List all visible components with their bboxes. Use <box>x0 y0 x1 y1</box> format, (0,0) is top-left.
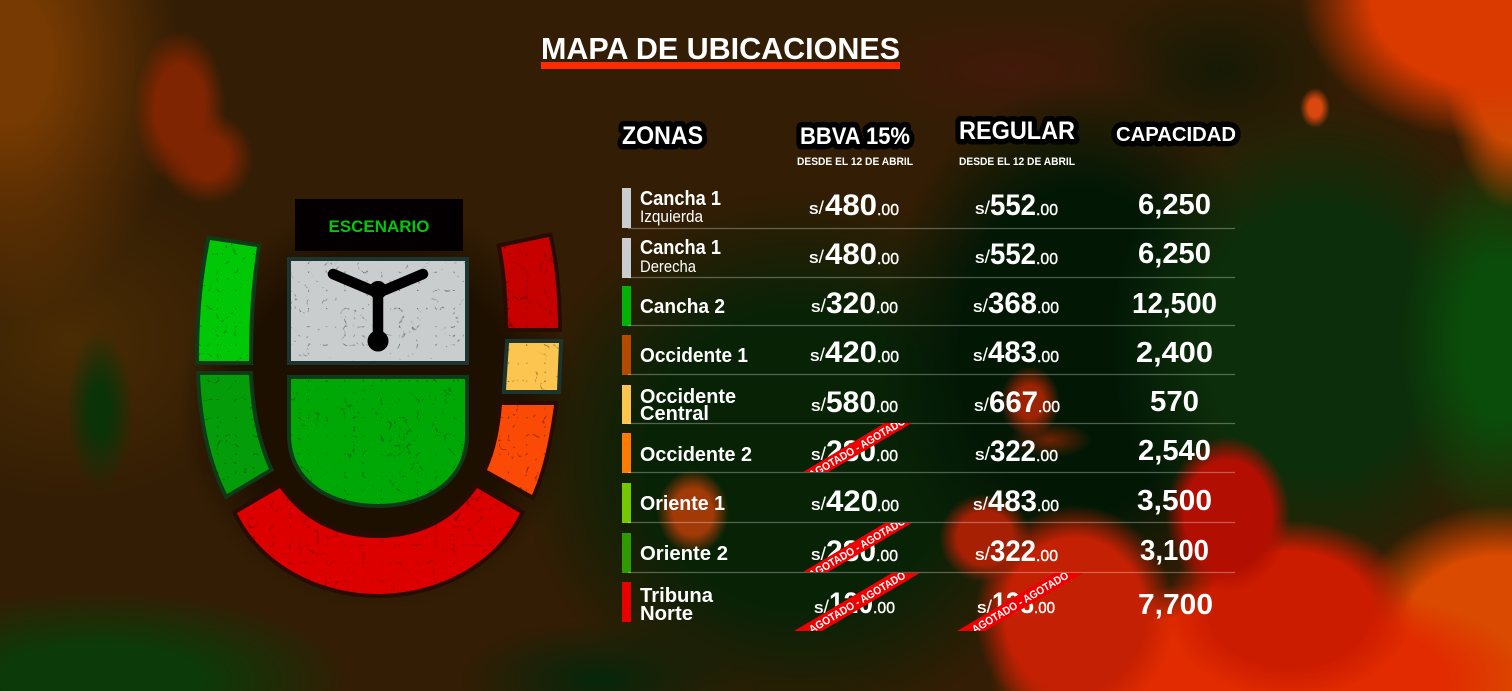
row: Cancha 1 Izquierda: Izquierda <box>640 207 703 226</box>
sold-out ribbon: Oriente 2 BBVA <box>803 523 912 572</box>
row: Occidente Central: Occidente <box>640 386 736 408</box>
row: Occidente 1 <box>622 335 1235 375</box>
icon: stage runway <box>333 274 423 352</box>
row: Oriente 1: .00 <box>877 498 899 515</box>
row: Occidente 1: S/ <box>973 345 988 365</box>
header: zonas: ZONAS <box>622 122 703 150</box>
row: Occidente 1: S/ <box>810 345 825 365</box>
header: BBVA 15%: BBVA 15% <box>800 123 910 150</box>
row: Oriente 2: S/ <box>811 544 826 564</box>
row: Cancha 1 Derecha <box>622 237 1235 278</box>
row: Occidente Central <box>622 385 1235 425</box>
row: Tribuna Norte: 7,700 <box>1138 589 1213 621</box>
zone: Oriente 2 <box>200 375 269 494</box>
zone: Tribuna Norte <box>237 488 520 594</box>
row: Tribuna Norte: 138 <box>992 587 1034 620</box>
row: Cancha 2: 368 <box>988 287 1037 320</box>
sold-out ribbon: Occidente 2 BBVA <box>803 423 912 472</box>
row: Occidente 1: Occidente 1 <box>640 345 748 367</box>
row: Tribuna Norte <box>622 582 1213 625</box>
header: regular <box>959 117 1075 168</box>
row: Tribuna Norte: .00 <box>1034 600 1055 617</box>
row: Cancha 1 Derecha: S/ <box>975 247 990 267</box>
row: Cancha 2: .00 <box>1037 300 1059 317</box>
row: Tribuna Norte: .00 <box>873 600 895 617</box>
row: Occidente Central: S/ <box>811 395 826 415</box>
sold-out ribbon: Tribuna Norte BBVA: AGOTADO - AGOTADO <box>807 569 908 636</box>
row: Cancha 1 Izquierda: 552 <box>990 189 1036 222</box>
row: Occidente 1: .00 <box>877 349 899 366</box>
stage label: ESCENARIO <box>328 217 430 236</box>
row: Cancha 2: 320 <box>826 287 876 320</box>
row: Occidente Central: 570 <box>1150 386 1199 418</box>
row: Occidente Central: Central <box>640 403 709 425</box>
header: regular: REGULAR <box>959 117 1075 145</box>
header: BBVA 15% <box>797 123 913 168</box>
sold-out ribbon: Oriente 2 BBVA: AGOTADO - AGOTADO <box>807 515 908 581</box>
row: Cancha 1 Derecha: S/ <box>809 247 824 267</box>
row: Oriente 1: .00 <box>1037 498 1059 515</box>
row: Cancha 1 Izquierda: S/ <box>809 198 824 218</box>
zone: Cancha 2 <box>291 379 465 504</box>
row: Cancha 2: .00 <box>876 300 898 317</box>
row: Occidente 2: S/ <box>975 444 990 464</box>
row: Cancha 2: Cancha 2 <box>640 296 725 318</box>
zone: Oriente 1 <box>199 240 257 361</box>
row: Occidente 2: S/ <box>811 444 826 464</box>
row: Occidente 1: 420 <box>825 336 877 369</box>
row: Tribuna Norte: Tribuna <box>640 585 714 607</box>
row: Cancha 1 Derecha: 552 <box>990 238 1036 271</box>
row: Tribuna Norte: S/ <box>977 597 992 617</box>
row: Cancha 1 Izquierda: .00 <box>1036 202 1058 219</box>
row: Cancha 2 <box>622 286 1235 326</box>
row: Oriente 2: .00 <box>1036 548 1058 565</box>
row: Oriente 1 <box>622 483 1235 523</box>
zone: Occidente 2 <box>487 405 554 495</box>
row: Occidente 2: Occidente 2 <box>640 444 752 466</box>
row: Cancha 1 Derecha: 480 <box>825 238 877 271</box>
row: Oriente 1: Oriente 1 <box>640 493 725 515</box>
row: Oriente 2: Oriente 2 <box>640 543 728 565</box>
row: Occidente Central: 580 <box>826 386 876 419</box>
row: Cancha 2: 12,500 <box>1132 288 1217 320</box>
header: capacidad: CAPACIDAD <box>1116 124 1236 146</box>
row: Oriente 2: 322 <box>990 535 1036 568</box>
row: Oriente 2 <box>622 533 1235 573</box>
row: Oriente 1: 3,500 <box>1137 485 1212 517</box>
row: Tribuna Norte: Norte <box>640 603 693 625</box>
row: Occidente 2: 322 <box>990 435 1036 468</box>
row: Cancha 1 Derecha: .00 <box>877 251 899 268</box>
row: Tribuna Norte: 120 <box>829 587 873 620</box>
row: Occidente 1: 2,400 <box>1136 337 1213 369</box>
row: Cancha 1 Izquierda: S/ <box>975 198 990 218</box>
row: Oriente 2: 280 <box>826 535 876 568</box>
row: Occidente 1: 483 <box>988 336 1037 369</box>
table header <box>622 117 1236 168</box>
row: Cancha 2: S/ <box>973 296 988 316</box>
row: Oriente 1: 420 <box>826 485 878 518</box>
stadium map <box>199 199 559 594</box>
row: Occidente 2: 2,540 <box>1138 435 1211 467</box>
row: Cancha 1 Izquierda: .00 <box>877 202 899 219</box>
row: Cancha 1 Derecha: Cancha 1 <box>640 237 721 259</box>
row: Oriente 2: .00 <box>876 548 898 565</box>
zone: Occidente 1 <box>501 237 558 328</box>
row: Oriente 1: 483 <box>988 485 1037 518</box>
row: Occidente 2 <box>622 433 1235 473</box>
row: Cancha 1 Izquierda: Cancha 1 <box>640 188 721 210</box>
row: Oriente 1: S/ <box>811 494 826 514</box>
header: BBVA 15%: DESDE EL 12 DE ABRIL <box>797 156 913 168</box>
sold-out ribbon: Occidente 2 BBVA: AGOTADO - AGOTADO <box>807 415 908 481</box>
row: Cancha 1 Derecha: .00 <box>1036 251 1058 268</box>
header: regular: DESDE EL 12 DE ABRIL <box>959 156 1075 168</box>
sold-out ribbon: Tribuna Norte Regular: AGOTADO - AGOTADO <box>970 569 1071 636</box>
row: Oriente 2: S/ <box>975 544 990 564</box>
row: Oriente 2: 3,100 <box>1140 535 1209 567</box>
row: Cancha 2: S/ <box>811 296 826 316</box>
row: Occidente 2: .00 <box>1036 448 1058 465</box>
row: Occidente Central: .00 <box>876 399 898 416</box>
row: Cancha 1 Derecha: 6,250 <box>1138 238 1211 270</box>
row: Tribuna Norte: S/ <box>814 597 829 617</box>
row: Cancha 1 Izquierda <box>622 188 1235 228</box>
row: Occidente 2: 280 <box>826 435 876 468</box>
row: Cancha 1 Izquierda: 6,250 <box>1138 189 1211 221</box>
row: Oriente 1: S/ <box>973 494 988 514</box>
row: Occidente Central: S/ <box>974 395 989 415</box>
row: Cancha 1 Izquierda: 480 <box>825 189 877 222</box>
row: Occidente 1: .00 <box>1037 349 1059 366</box>
row: Occidente Central: 667 <box>989 386 1038 419</box>
title: MAPA DE UBICACIONES <box>541 31 900 66</box>
zone: Cancha 1 <box>291 261 465 361</box>
zone texture <box>199 237 559 594</box>
row: Occidente 2: .00 <box>876 448 898 465</box>
row: Occidente Central: .00 <box>1038 399 1060 416</box>
stage label <box>295 199 463 251</box>
row: Cancha 1 Derecha: Derecha <box>640 257 696 276</box>
zone: Occidente Central <box>506 343 559 390</box>
